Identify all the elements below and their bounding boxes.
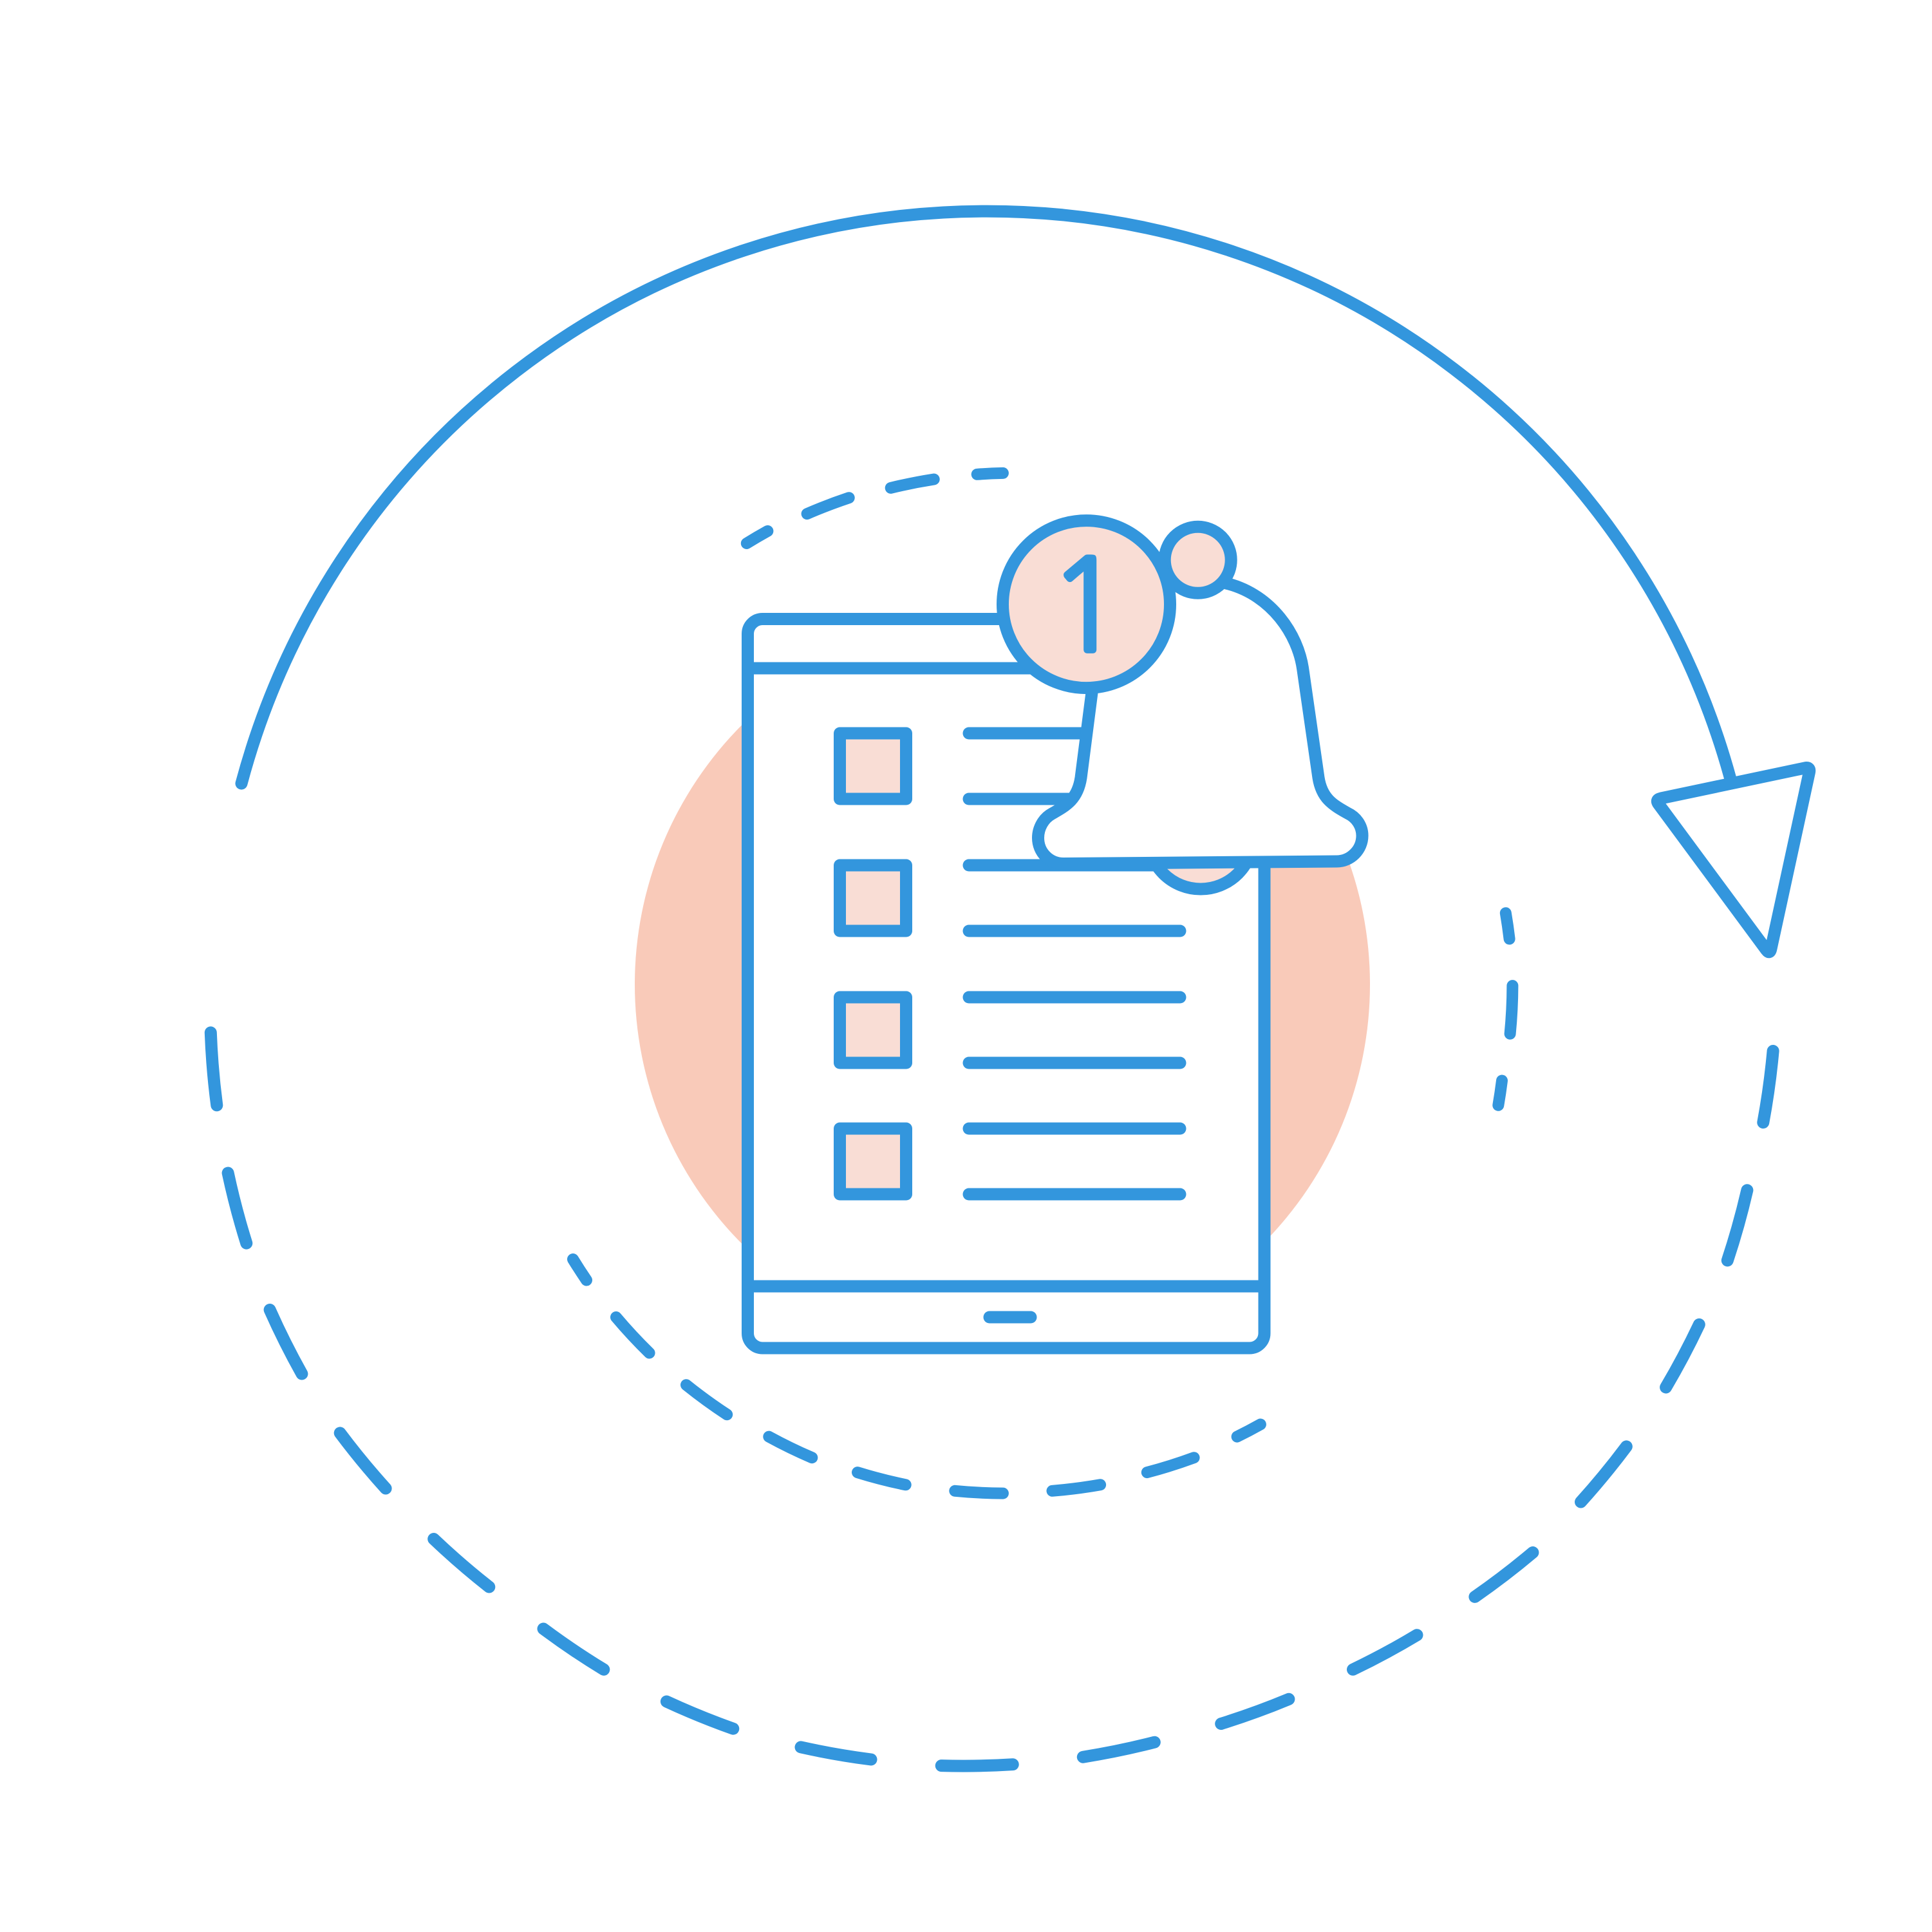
arc line <box>241 211 1730 783</box>
checkbox 4 <box>839 1129 906 1194</box>
checkbox 3 <box>839 997 906 1063</box>
top divider <box>748 662 1264 675</box>
inner dashed ring <box>573 473 1512 1494</box>
badge number: 1 <box>1047 543 1125 670</box>
arrow head <box>1657 768 1810 952</box>
device body <box>748 619 1264 1348</box>
text lines <box>969 733 1180 1194</box>
bottom divider <box>748 1280 1264 1293</box>
background peach circle <box>635 617 1370 1352</box>
badge circle <box>1003 521 1170 688</box>
bell knob <box>1165 527 1231 593</box>
tablet device <box>748 619 1264 1348</box>
outer arc with arrow <box>241 211 1810 952</box>
notification badge <box>1003 521 1170 688</box>
home button <box>989 1311 1031 1324</box>
checkbox 1 <box>839 733 906 799</box>
checkbox 2 <box>839 865 906 931</box>
bell clapper <box>1148 783 1253 889</box>
outer dashed ring <box>211 1033 1773 1766</box>
bell body <box>1038 577 1362 864</box>
